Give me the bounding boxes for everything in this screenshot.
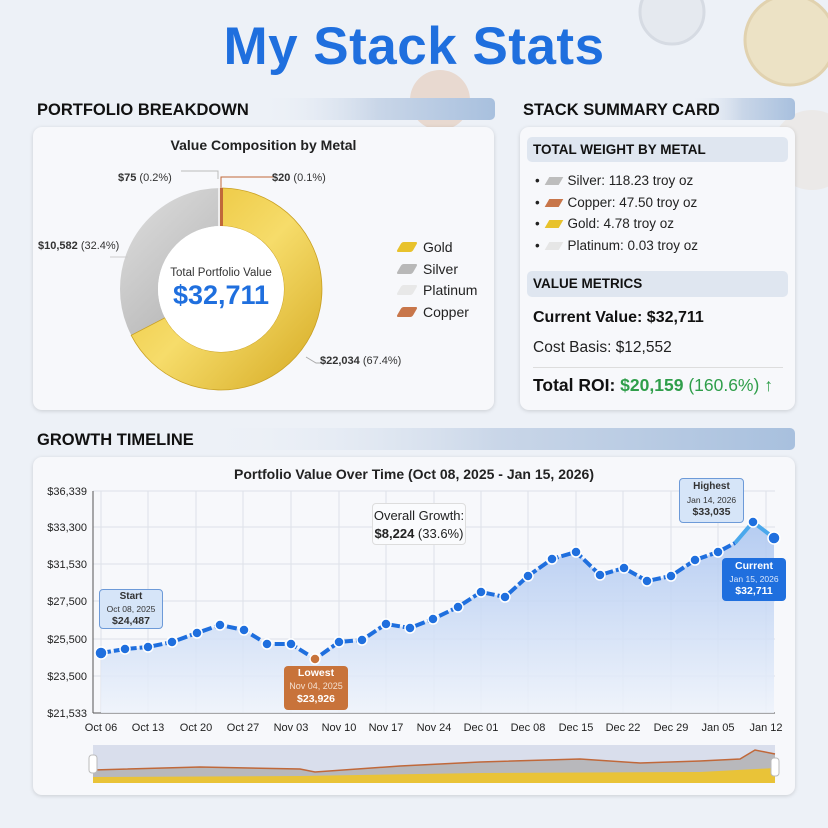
line chart: Jan 12 bbox=[749, 722, 783, 734]
weight list: • Copper: 47.50 troy oz bbox=[535, 194, 697, 210]
line chart: Oct 27 bbox=[227, 722, 259, 734]
callout: lowest: Nov 04, 2025 bbox=[289, 681, 343, 691]
weight list: • Silver: 118.23 troy oz bbox=[535, 173, 693, 188]
label: $20: $20 (0.1%) bbox=[272, 172, 326, 184]
callout: highest: Highest bbox=[693, 481, 730, 492]
line chart: $36,339 bbox=[47, 486, 87, 498]
callout: lowest bbox=[284, 666, 348, 710]
weight list: • Platinum: 0.03 troy oz bbox=[535, 238, 698, 252]
callout: start bbox=[99, 589, 163, 629]
donut chart bbox=[110, 170, 322, 390]
line chart: Dec 22 bbox=[606, 722, 640, 734]
header bands bbox=[260, 98, 495, 120]
line chart: Nov 03 bbox=[274, 722, 308, 734]
callout: start: Oct 08, 2025 bbox=[107, 604, 155, 614]
heading: portfolio breakdown: PORTFOLIO BREAKDOWN bbox=[37, 101, 249, 119]
line chart: $23,500 bbox=[47, 671, 87, 683]
callout: start: $24,487 bbox=[112, 615, 150, 627]
legend: Platinum bbox=[423, 282, 477, 298]
callout: overall growth: $8,224 (33.6%) bbox=[375, 526, 463, 541]
line chart: $33,300 bbox=[47, 522, 87, 534]
section header: total weight: TOTAL WEIGHT BY METAL bbox=[533, 142, 706, 157]
label: $10,582: $10,582 (32.4%) bbox=[38, 240, 119, 252]
title: My Stack Stats bbox=[223, 17, 605, 76]
donut center text: $32,711 bbox=[173, 280, 269, 310]
line chart: Oct 13 bbox=[132, 722, 164, 734]
label: $75: $75 (0.2%) bbox=[118, 172, 172, 184]
current value: Current Value: $32,711 bbox=[533, 309, 704, 326]
line chart: $27,500 bbox=[47, 596, 87, 608]
callout: current: Jan 15, 2026 bbox=[729, 574, 779, 584]
panel: growth timeline bbox=[33, 457, 795, 795]
line chart: $21,533 bbox=[47, 708, 87, 720]
line chart: $25,500 bbox=[47, 634, 87, 646]
line chart: Nov 10 bbox=[322, 722, 356, 734]
line chart: Portfolio Value Over Time (Oct 08, 2025 - Jan 15, 2026) bbox=[234, 466, 594, 482]
total roi: Total ROI: $20,159 (160.6%) ↑ bbox=[533, 375, 773, 395]
decorative coins bbox=[410, 0, 828, 190]
callout: current: $32,711 bbox=[735, 585, 773, 597]
section header: value metrics: VALUE METRICS bbox=[533, 276, 642, 291]
weight list: • Gold: 4.78 troy oz bbox=[535, 216, 674, 231]
callout: lowest: $23,926 bbox=[297, 693, 335, 705]
chart title: Value Composition by Metal bbox=[171, 137, 356, 153]
section header: total weight bbox=[527, 137, 788, 162]
donut center text bbox=[170, 267, 272, 310]
heading: growth timeline: GROWTH TIMELINE bbox=[37, 431, 194, 449]
label: $22,034: $22,034 (67.4%) bbox=[320, 355, 401, 367]
callout: lowest: Lowest bbox=[298, 667, 334, 679]
callout: current: Current bbox=[735, 560, 773, 572]
callout: start: Start bbox=[120, 591, 142, 602]
line chart: Oct 06 bbox=[85, 722, 117, 734]
callout: highest: $33,035 bbox=[693, 506, 730, 518]
legend: Copper bbox=[423, 304, 469, 320]
panel: stack summary bbox=[520, 127, 795, 410]
callout: highest: Jan 14, 2026 bbox=[687, 494, 736, 504]
heading: stack summary card: STACK SUMMARY CARD bbox=[523, 101, 720, 119]
callout: overall growth: Overall Growth: bbox=[374, 508, 464, 523]
callout: current bbox=[722, 558, 786, 601]
line chart: Jan 05 bbox=[701, 722, 735, 734]
legend bbox=[397, 239, 477, 320]
callout: overall growth bbox=[372, 503, 466, 545]
callout: highest bbox=[679, 478, 744, 523]
legend: Gold bbox=[423, 239, 453, 255]
line chart: Nov 17 bbox=[369, 722, 403, 734]
cost basis: Cost Basis: $12,552 bbox=[533, 339, 672, 356]
range slider bbox=[93, 745, 775, 783]
section header: value metrics bbox=[527, 271, 788, 297]
donut center text: Total Portfolio Value bbox=[170, 267, 272, 279]
line chart: Dec 08 bbox=[511, 722, 545, 734]
line chart: Dec 29 bbox=[654, 722, 688, 734]
line chart: Nov 24 bbox=[417, 722, 451, 734]
line chart: Dec 01 bbox=[464, 722, 498, 734]
panel: portfolio breakdown bbox=[33, 127, 494, 410]
line chart: Oct 20 bbox=[180, 722, 212, 734]
line chart: Dec 15 bbox=[559, 722, 593, 734]
legend: Silver bbox=[423, 260, 458, 276]
weight list bbox=[535, 173, 698, 253]
line chart: $31,530 bbox=[47, 559, 87, 571]
